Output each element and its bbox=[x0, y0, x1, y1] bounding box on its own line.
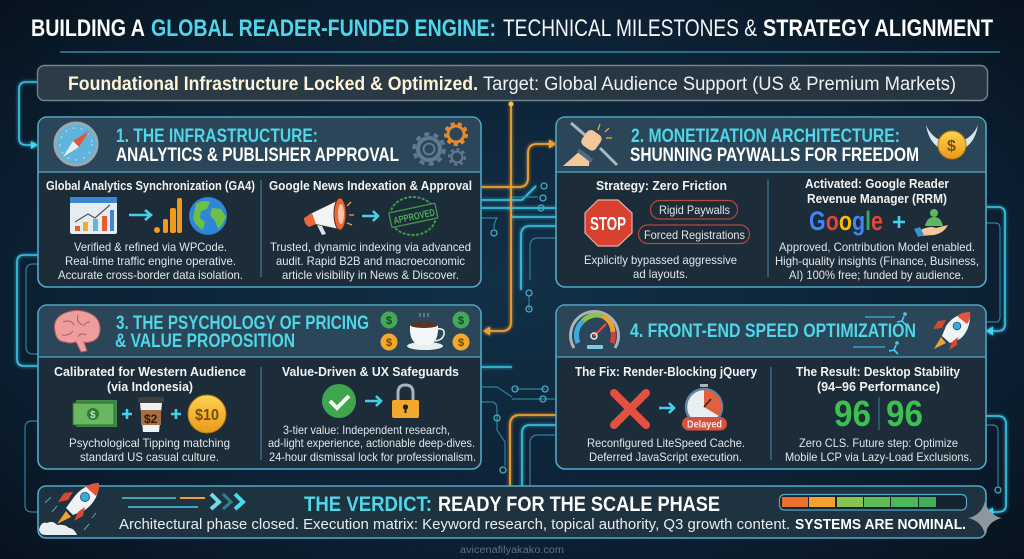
heading 2 bbox=[630, 126, 919, 166]
progress bar bbox=[780, 494, 966, 510]
icon: orange signal bars bbox=[154, 198, 182, 233]
descriptions: Real-time traffic engine operative. bbox=[65, 255, 236, 268]
icon: stop sign: STOP bbox=[590, 214, 626, 234]
icon: runners bbox=[853, 312, 907, 354]
subheadings: Value-Driven & UX Safeguards bbox=[282, 365, 459, 379]
descriptions: Accurate cross-border data isolation. bbox=[58, 269, 243, 282]
subheadings: The Fix: Render-Blocking jQuery bbox=[575, 365, 757, 379]
icon: coffee cup $2: $2 bbox=[144, 412, 158, 426]
performance scores bbox=[834, 393, 923, 434]
panel 3: psychology of pricing bbox=[38, 305, 481, 469]
subheadings bbox=[575, 365, 960, 394]
pills: Forced Registrations bbox=[644, 229, 745, 242]
icon: banknote bbox=[73, 400, 117, 427]
circuit lines bbox=[17, 82, 1006, 516]
icon: dollar coins: $ bbox=[458, 337, 464, 349]
panel 1: infrastructure bbox=[38, 117, 481, 287]
descriptions: Deferred JavaScript execution. bbox=[589, 451, 742, 464]
descriptions: Trusted, dynamic indexing via advanced bbox=[270, 241, 471, 254]
subheadings: Activated: Google Reader bbox=[805, 177, 949, 191]
icon: brain bbox=[54, 310, 100, 352]
title bbox=[31, 15, 993, 42]
descriptions: Psychological Tipping matching bbox=[69, 437, 230, 450]
verdict heading: READY FOR THE SCALE PHASE bbox=[438, 493, 720, 516]
icon: speed gauge bbox=[570, 312, 618, 349]
icon: megaphone bbox=[304, 198, 354, 235]
icon: padlock bbox=[392, 385, 419, 418]
arrow bbox=[362, 211, 378, 221]
descriptions: Verified & refined via WPCode. bbox=[74, 241, 227, 254]
icon: rocket bbox=[933, 312, 970, 350]
descriptions bbox=[587, 437, 972, 464]
pills bbox=[638, 200, 750, 244]
icon: dollar coins: $ bbox=[386, 315, 392, 327]
descriptions: Mobile LCP via Lazy-Load Exclusions. bbox=[785, 451, 972, 464]
heading 2: SHUNNING PAYWALLS FOR FREEDOM bbox=[630, 145, 919, 166]
arrow bbox=[659, 403, 674, 413]
performance scores: 96 bbox=[834, 393, 871, 434]
icon: $10 coin bbox=[188, 395, 226, 433]
heading 1 bbox=[116, 126, 399, 166]
verdict heading bbox=[304, 493, 720, 516]
descriptions: 24-hour dismissal lock for professionalism. bbox=[269, 451, 476, 464]
heading 3 bbox=[115, 313, 369, 352]
descriptions: Reconfigured LiteSpeed Cache. bbox=[587, 437, 745, 450]
banner: Target: Global Audience Support (US & Premium Markets) bbox=[483, 74, 956, 95]
subheadings: Calibrated for Western Audience bbox=[54, 365, 246, 379]
descriptions: audit. Rapid B2B and macroeconomic bbox=[276, 255, 465, 268]
heading 1: ANALYTICS & PUBLISHER APPROVAL bbox=[116, 145, 399, 166]
icon: approved stamp bbox=[389, 197, 438, 235]
heading 4: 4. FRONT-END SPEED OPTIMIZATION bbox=[630, 321, 916, 342]
descriptions bbox=[584, 241, 979, 282]
icon: coffee cup $2 bbox=[138, 397, 164, 432]
title: GLOBAL READER-FUNDED ENGINE: bbox=[151, 15, 496, 42]
subheadings: Google News Indexation & Approval bbox=[269, 179, 472, 193]
descriptions: AI) 100% free; funded by audience. bbox=[789, 269, 964, 282]
icon: stopwatch delayed: Delayed bbox=[687, 420, 722, 430]
title: BUILDING A bbox=[31, 15, 145, 42]
icon: red x bbox=[614, 393, 646, 425]
descriptions bbox=[58, 241, 471, 282]
plus bbox=[171, 409, 181, 419]
icon: compass bbox=[55, 123, 97, 165]
icon: check bbox=[322, 384, 356, 418]
icon: stop sign bbox=[585, 200, 632, 246]
icon: coffee cup bbox=[407, 313, 444, 350]
descriptions: standard US casual culture. bbox=[80, 451, 219, 464]
descriptions: High-quality insights (Finance, Business, bbox=[775, 255, 979, 268]
subheadings bbox=[596, 177, 949, 206]
icon: approved stamp: APPROVED bbox=[393, 208, 436, 227]
title: TECHNICAL MILESTONES & bbox=[503, 15, 757, 42]
icon: hand with person bbox=[914, 209, 948, 237]
banner bbox=[38, 66, 988, 100]
icon: dollar coins bbox=[380, 312, 470, 350]
descriptions: article visibility in News & Discover. bbox=[282, 269, 459, 282]
verdict text: Architectural phase closed. Execution matrix: Keyword research, topical authority, Q3 growth content. bbox=[119, 516, 790, 533]
verdict text: SYSTEMS ARE NOMINAL. bbox=[795, 516, 966, 533]
icon: analytics chart bbox=[70, 197, 117, 234]
icon: dollar coins: $ bbox=[386, 337, 392, 349]
subheadings bbox=[54, 365, 459, 394]
banner: Foundational Infrastructure Locked & Optimized. bbox=[68, 74, 478, 95]
heading 3: & VALUE PROPOSITION bbox=[115, 331, 295, 352]
arrow bbox=[129, 210, 151, 220]
subheadings: Strategy: Zero Friction bbox=[596, 179, 727, 193]
google wordmark: Google bbox=[809, 206, 883, 236]
subheadings bbox=[46, 179, 472, 193]
descriptions: 3-tier value: Independent research, bbox=[283, 424, 450, 437]
descriptions: Approved, Contribution Model enabled. bbox=[779, 241, 975, 254]
icon: launching rocket bbox=[39, 483, 99, 535]
descriptions: Explicitly bypassed aggressive bbox=[584, 254, 737, 267]
pills: Rigid Paywalls bbox=[659, 204, 730, 217]
panel: verdict bbox=[38, 483, 986, 538]
plus bbox=[893, 216, 905, 228]
icon: sparkle bbox=[968, 501, 1002, 535]
performance scores: 96 bbox=[886, 393, 923, 434]
descriptions: Zero CLS. Future step: Optimize bbox=[799, 437, 958, 450]
subheadings: The Result: Desktop Stability bbox=[796, 365, 960, 379]
subheadings: (via Indonesia) bbox=[107, 380, 193, 394]
icon: gears bbox=[414, 124, 466, 165]
descriptions bbox=[69, 424, 476, 464]
panel 2: monetization bbox=[556, 117, 986, 287]
subheadings: (94–96 Performance) bbox=[817, 380, 940, 394]
icon: $10 coin: $10 bbox=[195, 407, 219, 424]
speed streaks and chevrons bbox=[122, 494, 243, 509]
heading 1: 1. THE INFRASTRUCTURE: bbox=[116, 126, 318, 147]
icon: globe bbox=[189, 197, 227, 235]
icon: dollar coins: $ bbox=[458, 315, 464, 327]
heading 3: 3. THE PSYCHOLOGY OF PRICING bbox=[116, 313, 369, 334]
arrow bbox=[365, 396, 381, 406]
subheadings: Revenue Manager (RRM) bbox=[807, 192, 947, 206]
heading 2: 2. MONETIZATION ARCHITECTURE: bbox=[631, 126, 900, 147]
icon: winged coin bbox=[926, 125, 978, 159]
subheadings: Global Analytics Synchronization (GA4) bbox=[46, 179, 255, 193]
icon: stopwatch delayed bbox=[682, 384, 727, 430]
footer credit: avicenafilyakako.com bbox=[460, 545, 564, 556]
descriptions: ad-light experience, actionable deep-dives. bbox=[268, 437, 475, 450]
icon: banknote: $ bbox=[90, 410, 96, 421]
panel 4: front-end speed bbox=[556, 305, 986, 469]
icon: fist breaking chain bbox=[563, 123, 617, 166]
verdict heading: THE VERDICT: bbox=[304, 493, 432, 516]
descriptions: ad layouts. bbox=[633, 268, 688, 281]
plus bbox=[122, 409, 132, 419]
icon: winged coin: $ bbox=[947, 138, 956, 155]
